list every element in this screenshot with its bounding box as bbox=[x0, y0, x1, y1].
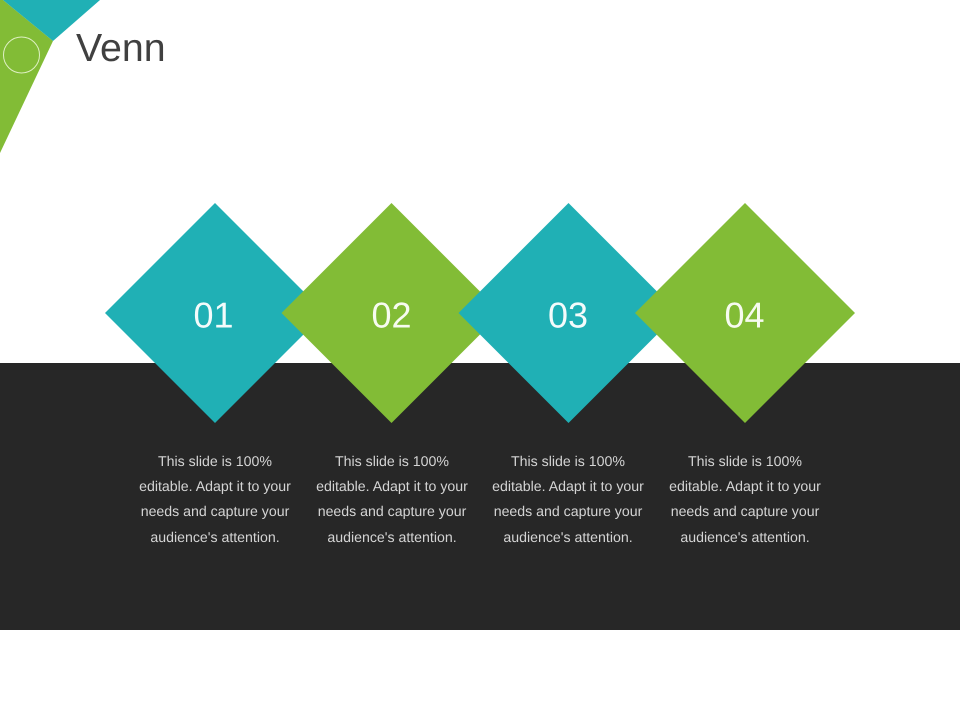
caption 03: audience's attention. bbox=[503, 529, 633, 545]
caption 04: audience's attention. bbox=[680, 529, 810, 545]
caption 04: editable. Adapt it to your bbox=[669, 478, 821, 494]
caption 01: audience's attention. bbox=[150, 529, 280, 545]
dark band bbox=[0, 363, 960, 630]
diamond 01 bbox=[105, 203, 325, 423]
caption 04 bbox=[669, 453, 821, 545]
caption 03 bbox=[492, 453, 644, 545]
caption 02 bbox=[316, 453, 468, 545]
diamond 01: 01 bbox=[193, 294, 234, 336]
caption 03: This slide is 100% bbox=[511, 453, 625, 469]
corner decoration bbox=[0, 0, 100, 153]
caption 01: needs and capture your bbox=[141, 503, 289, 519]
caption 04: This slide is 100% bbox=[688, 453, 802, 469]
diamond 03: 03 bbox=[548, 294, 588, 336]
caption 02: audience's attention. bbox=[327, 529, 457, 545]
caption 02: This slide is 100% bbox=[335, 453, 449, 469]
teal triangle bbox=[3, 0, 100, 41]
caption 02: editable. Adapt it to your bbox=[316, 478, 468, 494]
diamond 02 bbox=[282, 203, 502, 423]
title: Venn bbox=[76, 26, 166, 70]
caption 03: needs and capture your bbox=[494, 503, 642, 519]
circle outline bbox=[4, 37, 40, 73]
caption 01 bbox=[139, 453, 291, 545]
diamond 04: 04 bbox=[724, 294, 765, 336]
green triangle bbox=[0, 0, 53, 153]
caption 03: editable. Adapt it to your bbox=[492, 478, 644, 494]
caption 01: editable. Adapt it to your bbox=[139, 478, 291, 494]
diamond 02: 02 bbox=[371, 294, 412, 336]
caption 04: needs and capture your bbox=[671, 503, 819, 519]
diamond 03 bbox=[458, 203, 678, 423]
caption 02: needs and capture your bbox=[318, 503, 466, 519]
caption 01: This slide is 100% bbox=[158, 453, 272, 469]
diamond 04 bbox=[635, 203, 855, 423]
